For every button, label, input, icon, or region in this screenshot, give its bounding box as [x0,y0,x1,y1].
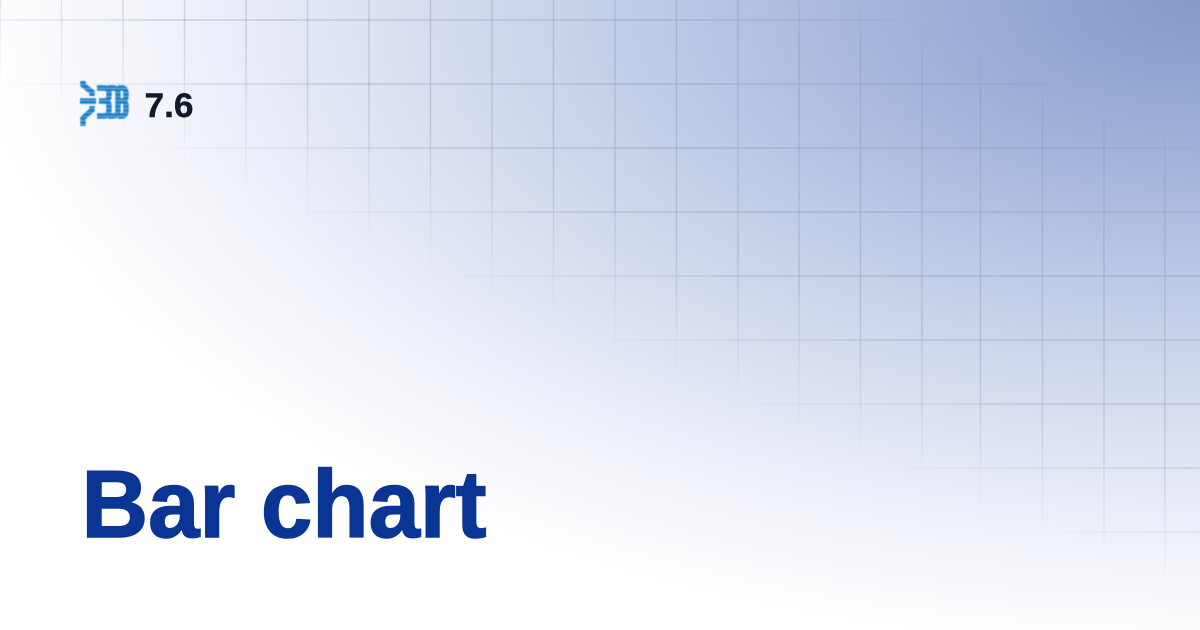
title: Bar chart [82,451,486,558]
version number: 7.6 [144,87,194,125]
icon: striped logo [80,81,126,126]
